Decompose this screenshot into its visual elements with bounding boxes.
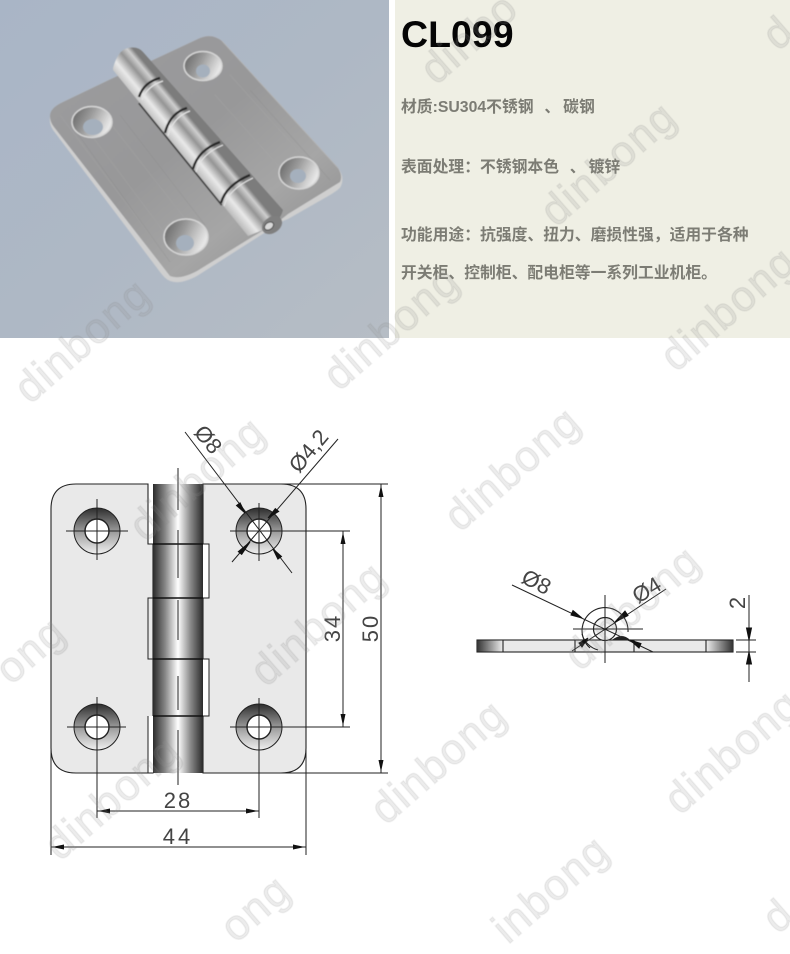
mounting holes (66, 499, 290, 818)
technical drawing: side view (477, 564, 756, 682)
dimension lines (51, 432, 388, 855)
panel: specifications (395, 0, 790, 338)
dimension labels: 34 (320, 614, 345, 642)
watermarks: dinbong: dinbong (5, 269, 160, 413)
photo: stainless steel hinge (50, 36, 342, 282)
spec: usage: 功能用途：抗强度、扭力、磨损性强，适用于各种 (401, 222, 749, 245)
side view labels: Ø8 (518, 564, 555, 600)
watermarks: dinbong: inbong (483, 826, 619, 953)
watermarks: dinbong: ong (211, 865, 300, 952)
dimension labels: Ø4,2 (284, 425, 333, 477)
dimension labels: 28 (164, 788, 192, 813)
spec: material: 材质:SU304不锈钢 、碳钢 (401, 97, 595, 116)
side view labels (518, 564, 750, 609)
leaders and dimension (512, 585, 756, 682)
dimension labels: 50 (358, 614, 383, 642)
barrel circles (573, 595, 643, 663)
watermarks: dinbong: dinbong (35, 726, 190, 870)
spec: usage: 开关柜、控制柜、配电柜等一系列工业机柜。 (401, 263, 717, 282)
side view labels: 2 (725, 597, 750, 609)
watermarks: dinbong: dinbong (361, 690, 516, 834)
plate section (477, 636, 733, 652)
dimension labels (163, 420, 383, 849)
knuckles (148, 468, 209, 785)
hinge plate outline (51, 484, 306, 773)
dimension labels: 44 (163, 824, 193, 849)
watermarks: dinbong: dinbong (435, 397, 590, 541)
watermarks: dinbong: dinbong (241, 552, 396, 696)
spec: surface treatment: 表面处理：不锈钢本色 、镀锌 (401, 154, 620, 177)
watermarks: dinbong: dinbong (120, 407, 275, 551)
watermarks: dinbong: dinbong (314, 256, 469, 400)
dimension labels: Ø8 (189, 420, 227, 459)
spec: usage (401, 222, 749, 282)
side view labels: Ø4 (628, 572, 666, 608)
countersunk holes (72, 52, 319, 255)
watermarks: dinbong: dinbong (555, 536, 710, 680)
panel: product photo (0, 0, 389, 338)
watermarks: dinbong: dinbong (531, 92, 686, 236)
title: CL099 (401, 13, 514, 55)
shadow beside barrel (139, 103, 222, 205)
technical drawing: front view (51, 420, 388, 855)
hinge barrel (113, 48, 283, 236)
